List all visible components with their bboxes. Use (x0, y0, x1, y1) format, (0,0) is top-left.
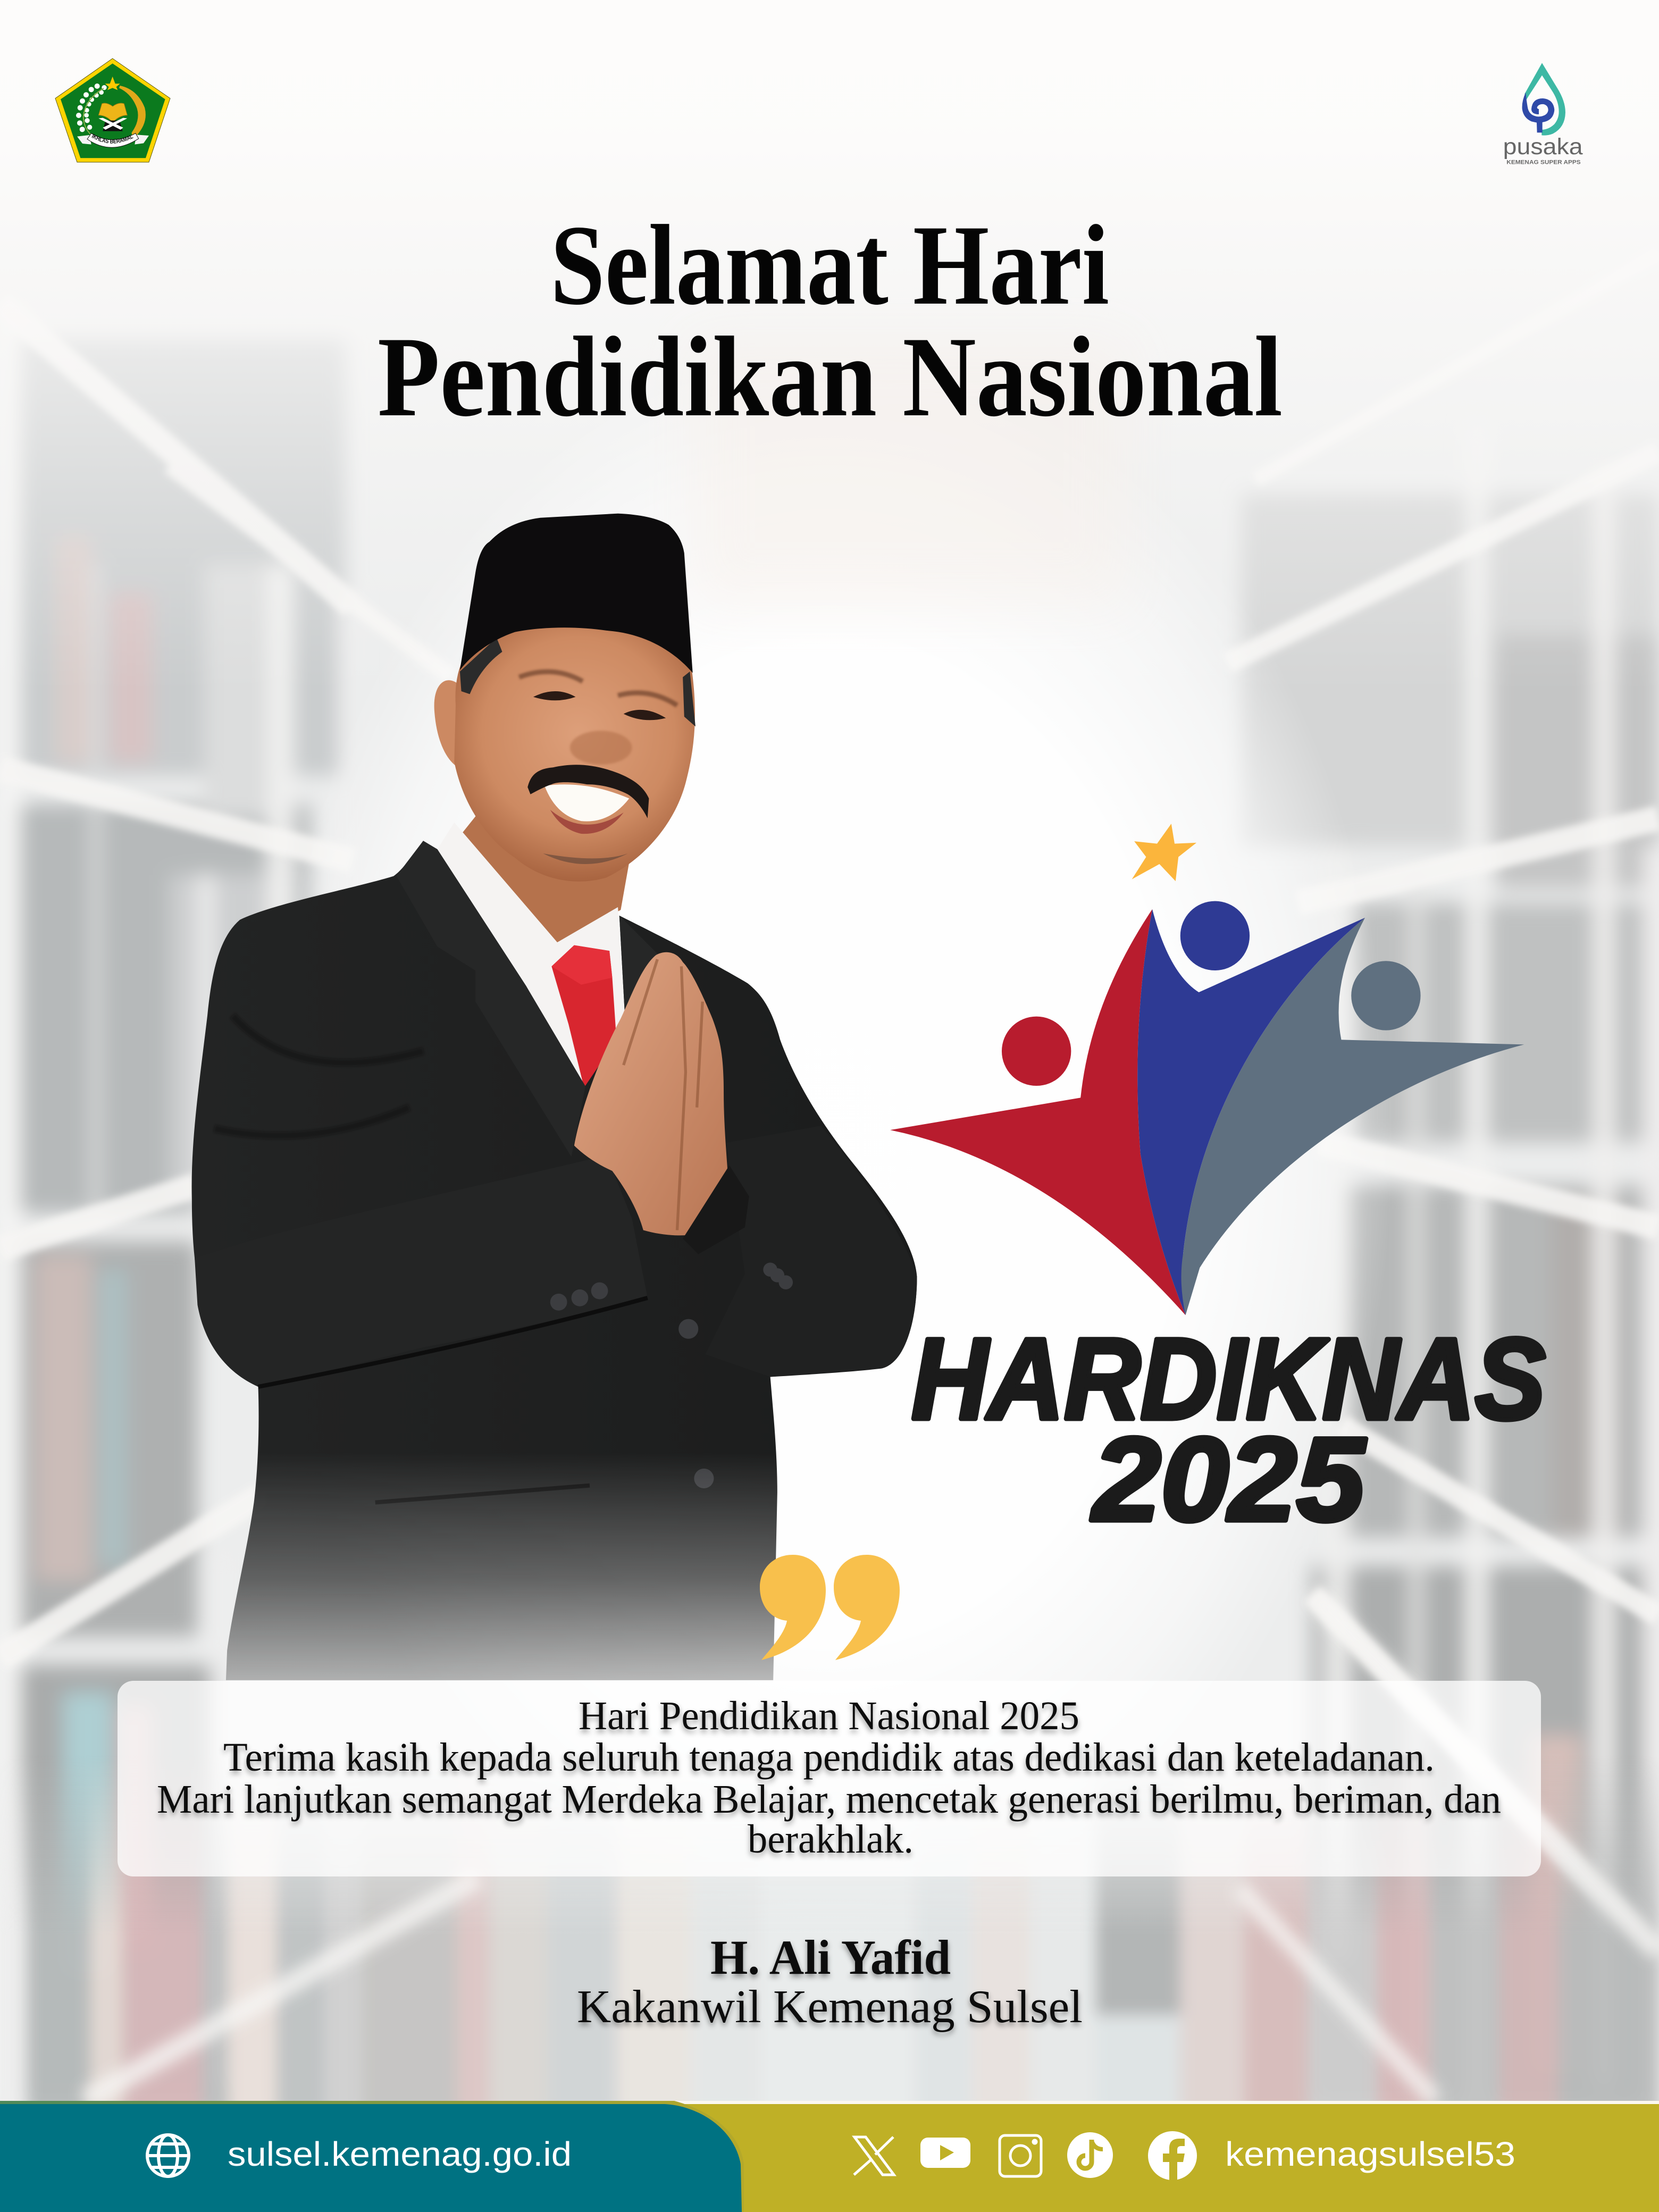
icon: Facebook (1148, 2131, 1197, 2180)
hands (574, 952, 730, 1235)
emblem motto: IKHLAS BERAMAL (91, 134, 133, 144)
logo wordmark (911, 1314, 1545, 1546)
mouth (544, 784, 629, 822)
logo wordmark: HARDIKNAS (911, 1314, 1545, 1443)
message text: Terima kasih kepada seluruh tenaga pendidik atas dedikasi dan keteladanan. (223, 1735, 1435, 1780)
message text: berakhlak. (748, 1817, 914, 1862)
bottom book spines (13, 1786, 1659, 2101)
icon: Instagram (1000, 2135, 1041, 2176)
jacket buttons (550, 1263, 793, 1488)
face (454, 612, 695, 882)
shirt collar (453, 832, 624, 1080)
neck (463, 811, 632, 942)
title: Pendidikan Nasional (378, 313, 1283, 440)
icon: YouTube (920, 2138, 970, 2168)
logo: Pusaka Kemenag Super Apps: pusaka (1503, 134, 1583, 160)
signature: name and position: H. Ali Yafid (710, 1930, 951, 1984)
right verticals (1467, 423, 1487, 2102)
left boards (0, 303, 353, 607)
icon: X (854, 2137, 894, 2175)
quote mark icon (760, 1555, 900, 1660)
logo wordmark: 2025 (1091, 1413, 1366, 1546)
footer bar (0, 2101, 1659, 2212)
icon: TikTok (1067, 2132, 1113, 2178)
title: Selamat Hari (550, 202, 1109, 329)
lapels (397, 841, 585, 1157)
message text: Hari Pendidikan Nasional 2025 (579, 1694, 1079, 1738)
ear (434, 680, 468, 770)
logo: Pusaka Kemenag Super Apps: KEMENAG SUPER APPS (1506, 159, 1581, 165)
icon: globe (147, 2135, 189, 2176)
message text: Mari lanjutkan semangat Merdeka Belajar, mencetak generasi berilmu, beriman, dan (157, 1777, 1501, 1822)
moustache (527, 765, 649, 818)
signature: name and position: Kakanwil Kemenag Sulsel (577, 1981, 1083, 2033)
lower diagonal boards (85, 1595, 1659, 2100)
left shelf bays (14, 339, 346, 776)
website text: sulsel.kemenag.go.id (228, 2135, 572, 2173)
logo figure: blue (1137, 901, 1365, 1315)
left sleeve (195, 1155, 648, 1387)
message panel (118, 1681, 1541, 1876)
right boards (1227, 451, 1659, 663)
social handle text: kemenagsulsel53 (1225, 2135, 1515, 2173)
logo: Hardiknas 2025 (890, 824, 1545, 1546)
right shelf bays (1242, 494, 1659, 847)
wristwatch (683, 1165, 749, 1254)
pocket (375, 1486, 590, 1503)
nose (570, 731, 632, 765)
chin beard (543, 853, 628, 864)
hair (460, 638, 696, 726)
logo: Kementerian Agama emblem (55, 58, 170, 163)
right sleeve (706, 1126, 917, 1377)
suit jacket (192, 841, 917, 1686)
logo figure: grey (1182, 918, 1524, 1315)
logo: Pusaka Kemenag Super Apps (1503, 63, 1583, 165)
whitening overlays (0, 0, 1659, 691)
hat (460, 514, 693, 673)
signature: name and position (577, 1930, 1083, 2033)
eyes (533, 691, 666, 720)
logo figure: red (890, 909, 1186, 1315)
tie (551, 945, 616, 1088)
message text (157, 1694, 1501, 1862)
portrait: man in black suit (192, 514, 917, 1686)
title (378, 202, 1283, 440)
logo star (1132, 824, 1196, 881)
footer website panel (0, 2104, 742, 2212)
left verticals (0, 311, 20, 2102)
